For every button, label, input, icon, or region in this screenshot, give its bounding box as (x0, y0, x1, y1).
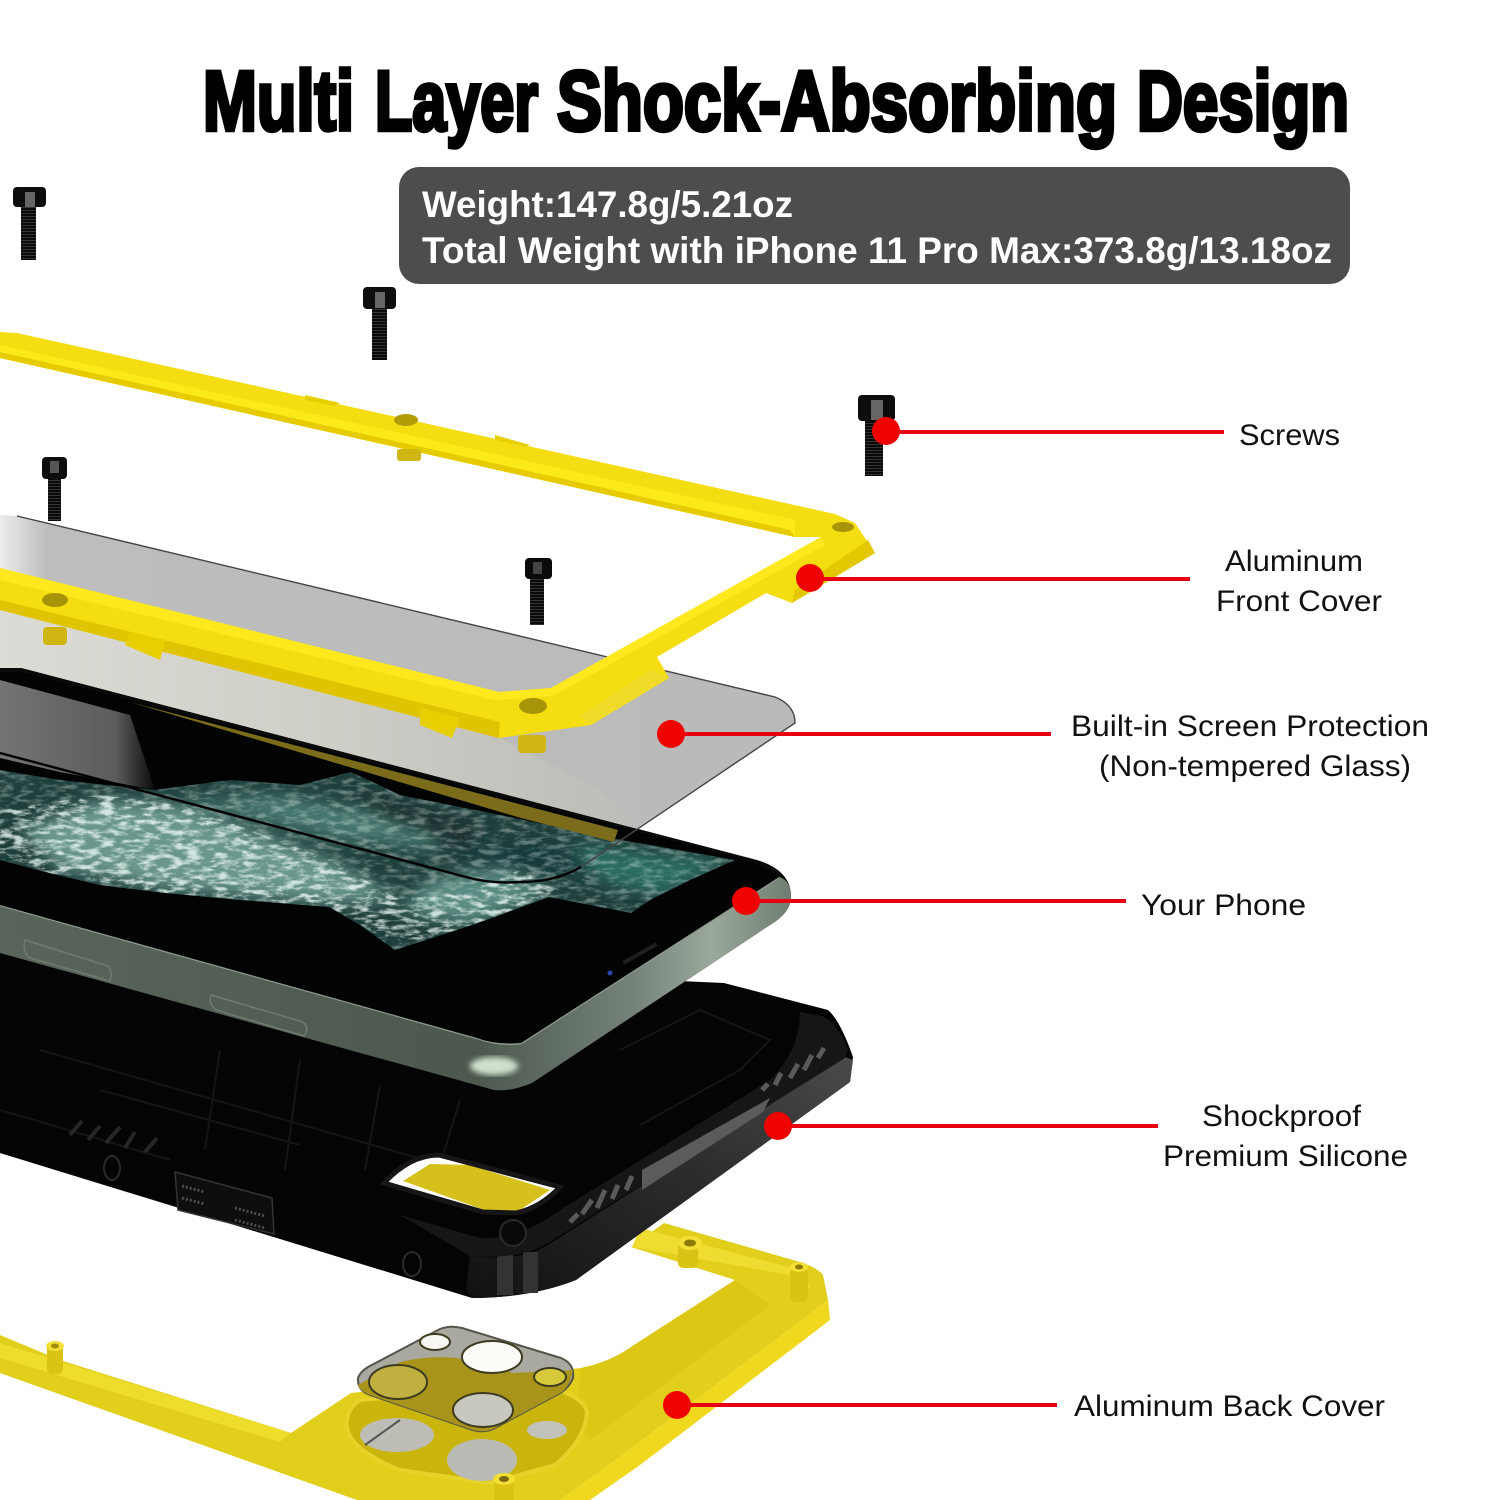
screws (13, 187, 895, 625)
weight callout box: Weight:147.8g/5.21oz (422, 184, 793, 225)
title: Multi (203, 54, 354, 148)
screw 4 (42, 457, 67, 521)
front cover darker faces (0, 345, 795, 537)
phone side frame (0, 877, 791, 1090)
case screw recesses (104, 1156, 526, 1276)
phone (0, 668, 791, 1090)
bright foam band (0, 795, 560, 945)
glass outline (17, 516, 795, 867)
callout: aluminum front cover: Aluminum (1225, 545, 1363, 578)
callout: screws (872, 417, 1340, 452)
front cover pins (43, 449, 546, 753)
glass lower lit area (0, 610, 638, 829)
case left vents (70, 1121, 157, 1152)
callout: aluminum back cover: Aluminum Back Cover (1074, 1390, 1385, 1423)
weight callout box: Total Weight with iPhone 11 Pro Max:373.8g/13.18oz (422, 230, 1332, 271)
callout: screws: Screws (1239, 419, 1340, 452)
callout: your phone (732, 887, 1306, 922)
phone corner highlight (470, 1057, 518, 1075)
case faint ribs (0, 1010, 770, 1170)
callout: your phone: Your Phone (1141, 889, 1306, 922)
screw 1 (13, 187, 46, 260)
camera recess (347, 1385, 587, 1483)
case rim highlight (400, 1012, 848, 1257)
screw 3 (858, 395, 895, 476)
screw 2 (363, 287, 396, 360)
case corner ribs (497, 1252, 538, 1295)
title: Layer (375, 54, 538, 148)
charging port cover (175, 1172, 274, 1234)
aluminum back cover (0, 1223, 830, 1500)
screw 5 (525, 558, 552, 625)
screen protector glass (0, 515, 795, 882)
callout: aluminum front cover: Front Cover (1216, 585, 1382, 618)
phone screen (0, 672, 779, 1043)
case outer side wall (466, 1057, 853, 1298)
silicone case (0, 950, 853, 1298)
callout: aluminum front cover (796, 545, 1382, 618)
glass above phone edge (0, 515, 795, 829)
case window (384, 1155, 560, 1213)
title: Shock-Absorbing (557, 54, 1117, 148)
general foam noise (0, 770, 734, 950)
front cover small tabs (125, 395, 530, 738)
wave colour patches (20, 790, 730, 925)
lens plate holes (369, 1334, 566, 1427)
back cover posts (46, 1236, 808, 1500)
lens cut-outs (360, 1418, 567, 1481)
callout: shockproof silicone: Premium Silicone (1163, 1140, 1408, 1173)
title: Design (1137, 54, 1349, 148)
camera lens plate (358, 1327, 573, 1431)
callout: aluminum back cover (663, 1390, 1385, 1423)
callout: built-in screen protection: Built-in Screen Protection (1071, 710, 1429, 743)
wallpaper waves (0, 680, 760, 970)
callout: built-in screen protection: (Non-tempered Glass) (1099, 750, 1411, 783)
case vents (570, 1048, 824, 1222)
earpiece and camera dot (608, 945, 655, 976)
frame reflection on phone (130, 702, 618, 842)
phone side buttons (24, 940, 307, 1036)
front cover bolt holes (42, 414, 854, 714)
callout: shockproof silicone (764, 1100, 1408, 1173)
case groove strip (642, 1098, 770, 1190)
callout: built-in screen protection (657, 710, 1429, 783)
weight callout box (399, 167, 1350, 284)
title (203, 54, 1349, 148)
grey glass reflection over screen (0, 680, 155, 790)
callout: shockproof silicone: Shockproof (1202, 1100, 1362, 1133)
aluminum front cover (0, 332, 875, 753)
